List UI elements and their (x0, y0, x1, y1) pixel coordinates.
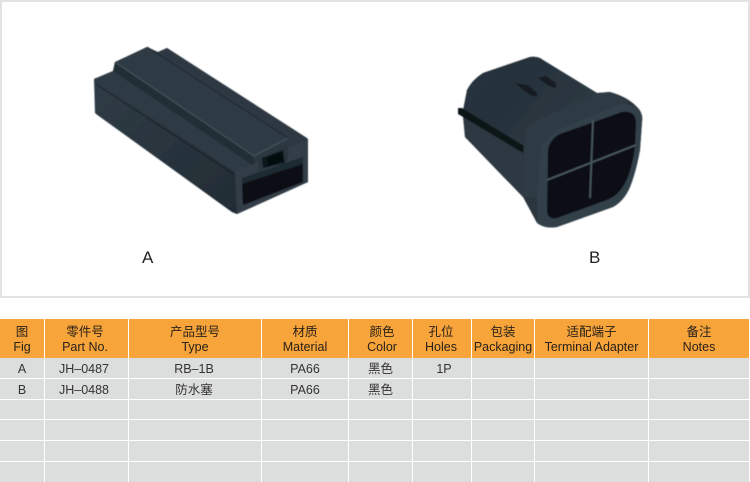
header: Part No.: Part No. (62, 340, 108, 354)
header: Color: 颜色 (369, 325, 394, 339)
header: Type: 产品型号 (170, 325, 220, 339)
specification table (0, 319, 749, 482)
header: Fig: 图 (16, 325, 28, 339)
header: Part No.: 零件号 (66, 325, 104, 339)
row B: JH–0488 (59, 383, 109, 397)
row A: JH–0487 (59, 362, 109, 376)
connector A illustration (93, 46, 644, 228)
header: Packaging (472, 319, 534, 358)
header: Terminal Adapter (535, 319, 648, 358)
row A: RB–1B (174, 362, 214, 376)
panel: product photos (0, 0, 750, 298)
row A: 黑色 (368, 362, 393, 376)
header: Notes (649, 319, 749, 358)
header: Fig (0, 319, 44, 358)
header: Color: Color (367, 340, 397, 354)
header: Holes: Holes (425, 340, 457, 354)
header: Notes: Notes (683, 340, 715, 354)
row B: B (18, 383, 26, 397)
row A: A (18, 362, 26, 376)
connector B illustration (458, 57, 642, 227)
row B: PA66 (290, 383, 320, 397)
row A (0, 358, 749, 378)
header: Type (129, 319, 261, 358)
header: Packaging: 包装 (490, 325, 516, 339)
row A: 1P (436, 362, 452, 376)
row B (0, 379, 749, 399)
header: Holes (413, 319, 471, 358)
header: Notes: 备注 (686, 325, 712, 339)
header: Color (349, 319, 412, 358)
empty table rows (0, 400, 749, 482)
header: Type: Type (181, 340, 209, 354)
header: Terminal Adapter: 适配端子 (566, 325, 616, 339)
label B: B (589, 248, 600, 267)
header: Packaging: Packaging (474, 340, 532, 354)
header: Holes: 孔位 (428, 325, 454, 339)
header: Material: 材质 (292, 325, 318, 339)
label A: A (142, 248, 153, 267)
header: Terminal Adapter: Terminal Adapter (545, 340, 638, 354)
row B: 防水塞 (175, 383, 213, 397)
header: Material: Material (283, 340, 327, 354)
row B: 黑色 (368, 383, 393, 397)
row A: PA66 (290, 362, 320, 376)
header: Material (262, 319, 348, 358)
header: Part No. (45, 319, 128, 358)
header: Fig: Fig (13, 340, 31, 354)
